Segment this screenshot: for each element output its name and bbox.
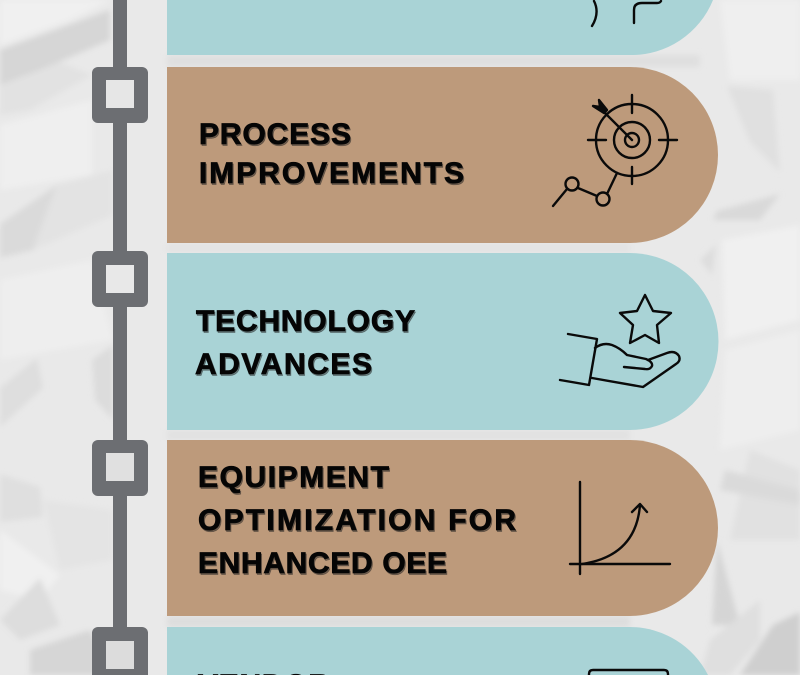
heading: equipment optimization for enhanced oee: [198, 461, 516, 580]
timeline rail: [92, 0, 148, 675]
icon: target and growth line: [553, 95, 677, 206]
icon: growth curve chart: [570, 482, 670, 574]
heading: equipment optimization for enhanced oee: OPTIMIZATION FOR: [198, 504, 516, 537]
node 4 window: [106, 641, 134, 669]
heading: process improvements: IMPROVEMENTS: [199, 157, 464, 190]
heading: process improvements: [199, 118, 464, 190]
panel: top teal (cropped): [167, 0, 713, 55]
icon: cropped top icon: [592, 1, 661, 26]
panel: process improvements: [167, 67, 718, 243]
heading: equipment optimization for enhanced oee: EQUIPMENT: [198, 461, 389, 494]
heading: technology advances: ADVANCES: [195, 348, 372, 381]
heading: process improvements: PROCESS: [199, 118, 351, 151]
timeline node 2: [92, 251, 148, 307]
timeline node 1: [92, 67, 148, 123]
panel: equipment optimization: [167, 440, 718, 616]
timeline node 4: [92, 627, 148, 675]
panel: vendor (cropped): [167, 627, 708, 675]
heading: technology advances: [195, 305, 415, 381]
timeline node 3: [92, 440, 148, 496]
icon: hand holding star: [560, 295, 680, 387]
node 1 window: [106, 80, 134, 108]
panel: technology advances: [167, 253, 719, 430]
node 2 window: [106, 265, 134, 293]
heading: equipment optimization for enhanced oee: ENHANCED OEE: [198, 547, 447, 580]
node 3 window: [106, 453, 134, 481]
icon: cropped rounded box: [589, 670, 668, 675]
heading: technology advances: TECHNOLOGY: [196, 305, 415, 338]
